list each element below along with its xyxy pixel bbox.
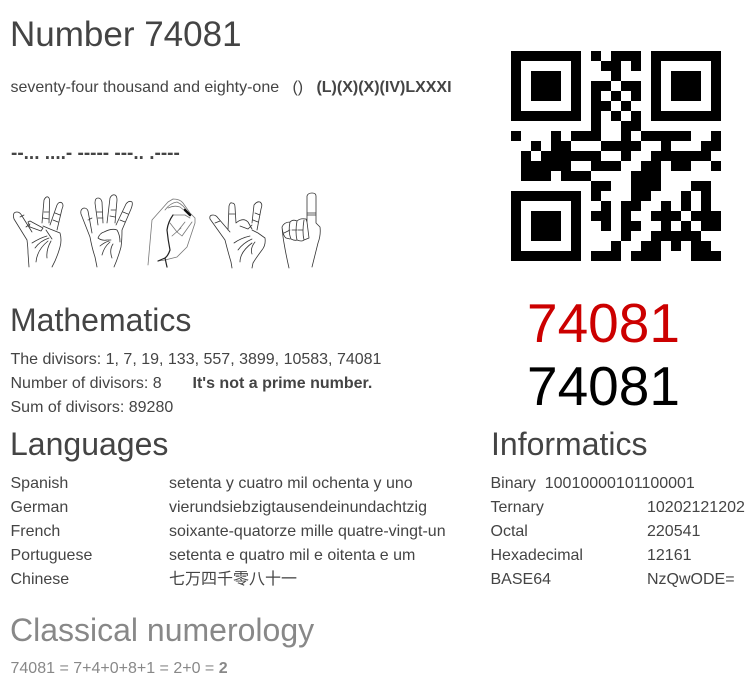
text block: divisors (10, 351, 381, 416)
text block: divisors: Number of divisors: 8 (10, 375, 162, 392)
title: Number 74081 (10, 15, 242, 54)
table: languages: soixante-quatorze mille quatre-vingt-un (169, 523, 446, 540)
table: languages: German (10, 499, 68, 516)
text block: divisors: It's not a prime number. (192, 375, 372, 392)
heading: Classical numerology: Classical numerology (10, 612, 314, 648)
table: informatics: NzQwODE= (647, 571, 735, 588)
table: informatics: Hexadecimal (490, 547, 583, 564)
morse code: --... ....- ----- ---.. .---- (11, 143, 180, 164)
table: informatics: 10202121202 (647, 499, 745, 516)
black number: 74081 (527, 355, 680, 417)
table: languages: vierundsiebzigtausendeinundachtzig (169, 499, 427, 516)
QR code (511, 51, 721, 261)
icon: hand digit 7 (13, 197, 63, 267)
number in words and roman numeral: seventy-four thousand and eighty-one () (L)(X)(X)(IV)LXXXI (10, 79, 452, 96)
table: informatics: 12161 (647, 547, 692, 564)
icon: hand digit 8 (210, 202, 265, 268)
table: informatics: Ternary (490, 499, 544, 516)
table: informatics: Octal (490, 523, 528, 540)
icon: hand digit 0 (148, 199, 195, 267)
heading: Mathematics: Mathematics (10, 302, 191, 338)
icon: hand digit 4 (81, 195, 132, 267)
red number: 74081 (527, 292, 680, 354)
heading: Informatics: Informatics (491, 426, 647, 462)
text block: divisors: Sum of divisors: 89280 (10, 399, 173, 416)
table: languages: Portuguese (10, 547, 92, 564)
table: languages: setenta y cuatro mil ochenta y uno (169, 475, 413, 492)
text block: divisors: The divisors: 1, 7, 19, 133, 557, 3899, 10583, 74081 (10, 351, 381, 368)
icon: sign language hands (13, 192, 321, 268)
table: languages: 七万四千零八十一 (169, 571, 297, 588)
table: languages (10, 475, 446, 588)
icon: hand digit 1 (282, 193, 320, 268)
table: languages: setenta e quatro mil e oitenta e um (169, 547, 415, 564)
heading: Languages: Languages (10, 426, 168, 462)
table: languages: Spanish (10, 475, 68, 492)
table: languages: Chinese (10, 571, 69, 588)
numerology calculation: 74081 = 7+4+0+8+1 = 2+0 = 2 (10, 660, 228, 677)
table: informatics: 220541 (647, 523, 700, 540)
table: languages: French (10, 523, 60, 540)
table: informatics (490, 475, 745, 588)
table: informatics: BASE64 (490, 571, 551, 588)
table: informatics: Binary 10010000101100001 (490, 475, 695, 492)
